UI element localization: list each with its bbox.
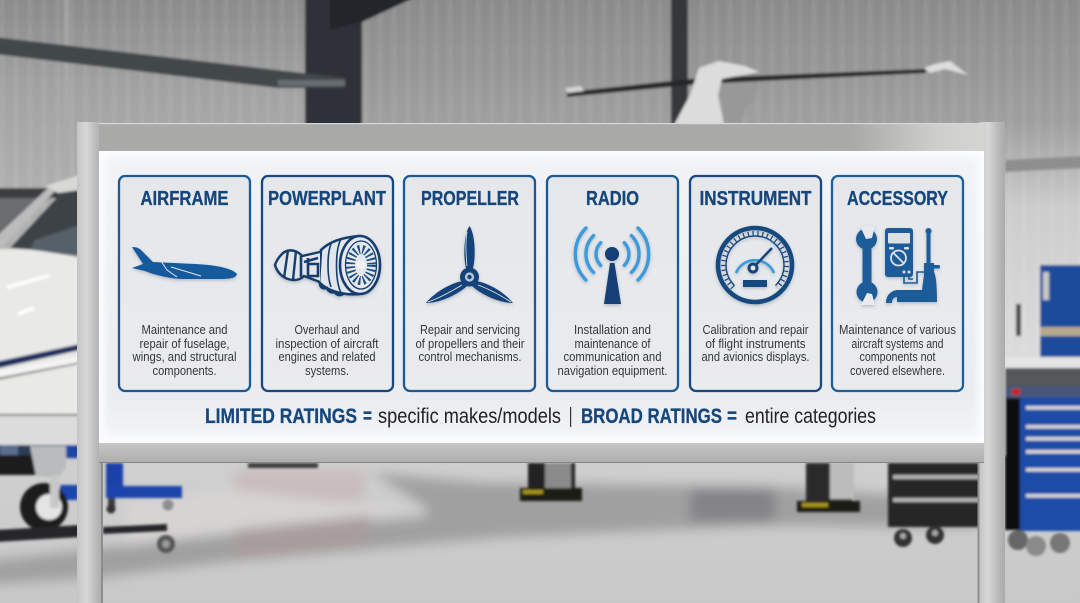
card: instrument [690,176,821,391]
description: radio: maintenance of [574,337,651,351]
icon: airplane [132,247,237,279]
footer: ratings legend: = [363,405,372,428]
footer: ratings legend: specific makes/models [378,405,561,428]
card: airframe [119,176,250,391]
icon: radio mast with signal waves [575,228,649,304]
description: instrument: Calibration and repair [702,323,808,337]
description: radio: Installation and [574,323,651,337]
card: propeller [404,176,535,391]
hangar floor [0,455,1080,603]
description: airframe: components. [152,364,216,378]
heading: accessory: ACCESSORY [847,187,948,210]
footer: ratings legend: BROAD RATINGS [581,405,722,428]
description: propeller: of propellers and their [416,337,524,351]
description: powerplant: systems. [305,364,349,378]
icon: gauge dial [718,228,792,302]
heading: airframe: AIRFRAME [140,187,228,210]
description: instrument: of flight instruments [706,337,806,351]
description: radio: communication and [564,350,662,364]
card: accessory [832,176,963,391]
icon: jet engine [275,236,380,295]
description: radio: navigation equipment. [558,364,668,378]
aircraft tail [565,61,968,125]
description: propeller: control mechanisms. [418,350,522,364]
heading: powerplant: POWERPLANT [268,187,386,210]
card: powerplant [262,176,393,391]
heading: radio: RADIO [586,187,639,210]
description: powerplant: engines and related [278,350,376,364]
parked aircraft fuselage [0,175,80,445]
blue tool cart [103,463,182,553]
description: accessory: Maintenance of various [839,323,956,337]
description: accessory: covered elsewhere. [850,364,945,378]
black tool cart [888,463,983,547]
icon: wrench, multimeter and jack [856,226,940,305]
sign frame: aluminium posts and rails [77,122,1005,603]
footer: ratings legend [205,405,876,428]
footer: ratings legend: LIMITED RATINGS [205,405,357,428]
footer: ratings legend: = [727,405,737,428]
description: airframe: Maintenance and [142,323,228,337]
heading: propeller: PROPELLER [421,187,519,210]
blue tool cabinet and workbench [1005,265,1080,556]
landing gear wheel [0,445,80,542]
description: powerplant: Overhaul and [294,323,360,337]
description: instrument: and avionics displays. [702,350,810,364]
description: powerplant: inspection of aircraft [276,337,379,351]
floor stands [248,463,860,512]
icon: three-blade propeller [426,226,513,303]
panel: illuminated sign [99,151,984,443]
description: accessory: aircraft systems and [852,337,944,351]
description: airframe: repair of fuselage, [140,337,230,351]
card: radio [547,176,678,391]
footer: ratings legend: entire categories [745,405,876,428]
description: airframe: wings, and structural [132,350,236,364]
heading: instrument: INSTRUMENT [700,187,812,210]
description: accessory: components not [860,350,936,364]
description: propeller: Repair and servicing [420,323,520,337]
